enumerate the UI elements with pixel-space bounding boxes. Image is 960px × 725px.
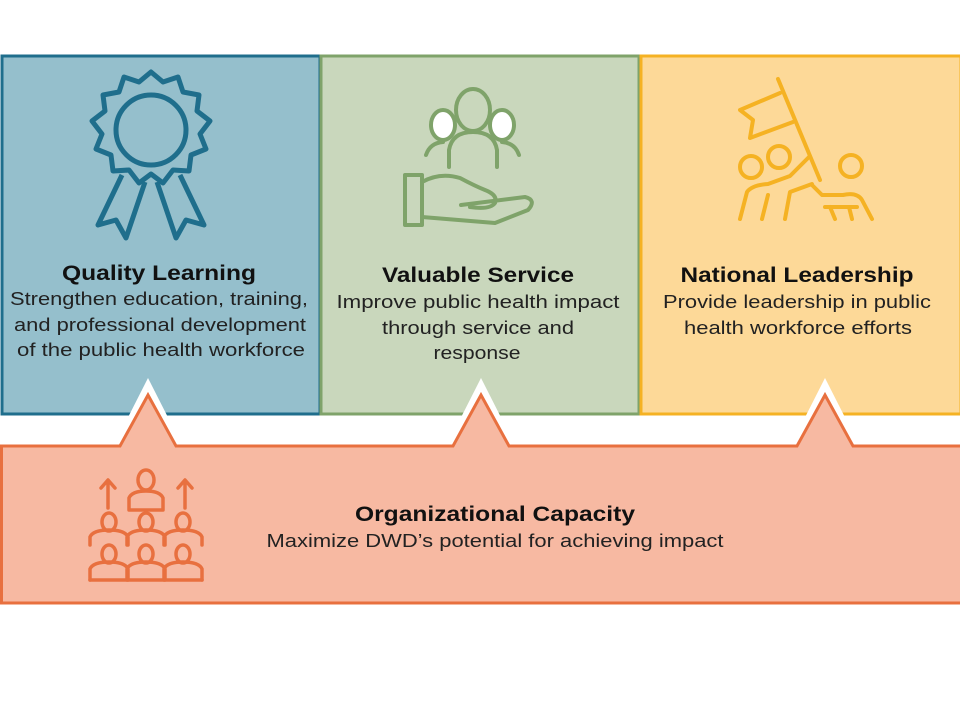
text: valuable service description xyxy=(336,292,620,363)
panel: quality learning xyxy=(2,56,320,414)
icon: group with arrows xyxy=(90,470,202,580)
heading: national leadership: National Leadership xyxy=(680,264,914,287)
heading: organizational capacity: Organizational Capacity xyxy=(355,503,635,526)
text: valuable service description: Improve public health impact xyxy=(336,292,620,312)
text: national leadership description: Provide leadership in public xyxy=(663,292,931,312)
text: valuable service description: through service and xyxy=(382,318,574,338)
heading: valuable service: Valuable Service xyxy=(382,264,574,287)
text: quality learning description: Strengthen education, training, xyxy=(10,289,308,309)
text: valuable service description: response xyxy=(434,343,520,363)
icon: award ribbon xyxy=(92,72,210,238)
icon: people raising flag xyxy=(740,79,872,219)
text: organizational capacity description: Maximize DWD’s potential for achieving impact xyxy=(266,531,724,551)
text: quality learning description: of the public health workforce xyxy=(17,340,305,360)
heading: quality learning: Quality Learning xyxy=(62,262,256,285)
icon: hand with people xyxy=(405,89,532,225)
panel: valuable service xyxy=(321,56,639,414)
text: national leadership description: health workforce efforts xyxy=(684,318,912,338)
text: quality learning description xyxy=(10,289,308,360)
text: national leadership description xyxy=(663,292,931,338)
panel: organizational capacity xyxy=(1,378,960,604)
panel: national leadership xyxy=(641,56,960,414)
text: quality learning description: and professional development xyxy=(14,315,306,335)
